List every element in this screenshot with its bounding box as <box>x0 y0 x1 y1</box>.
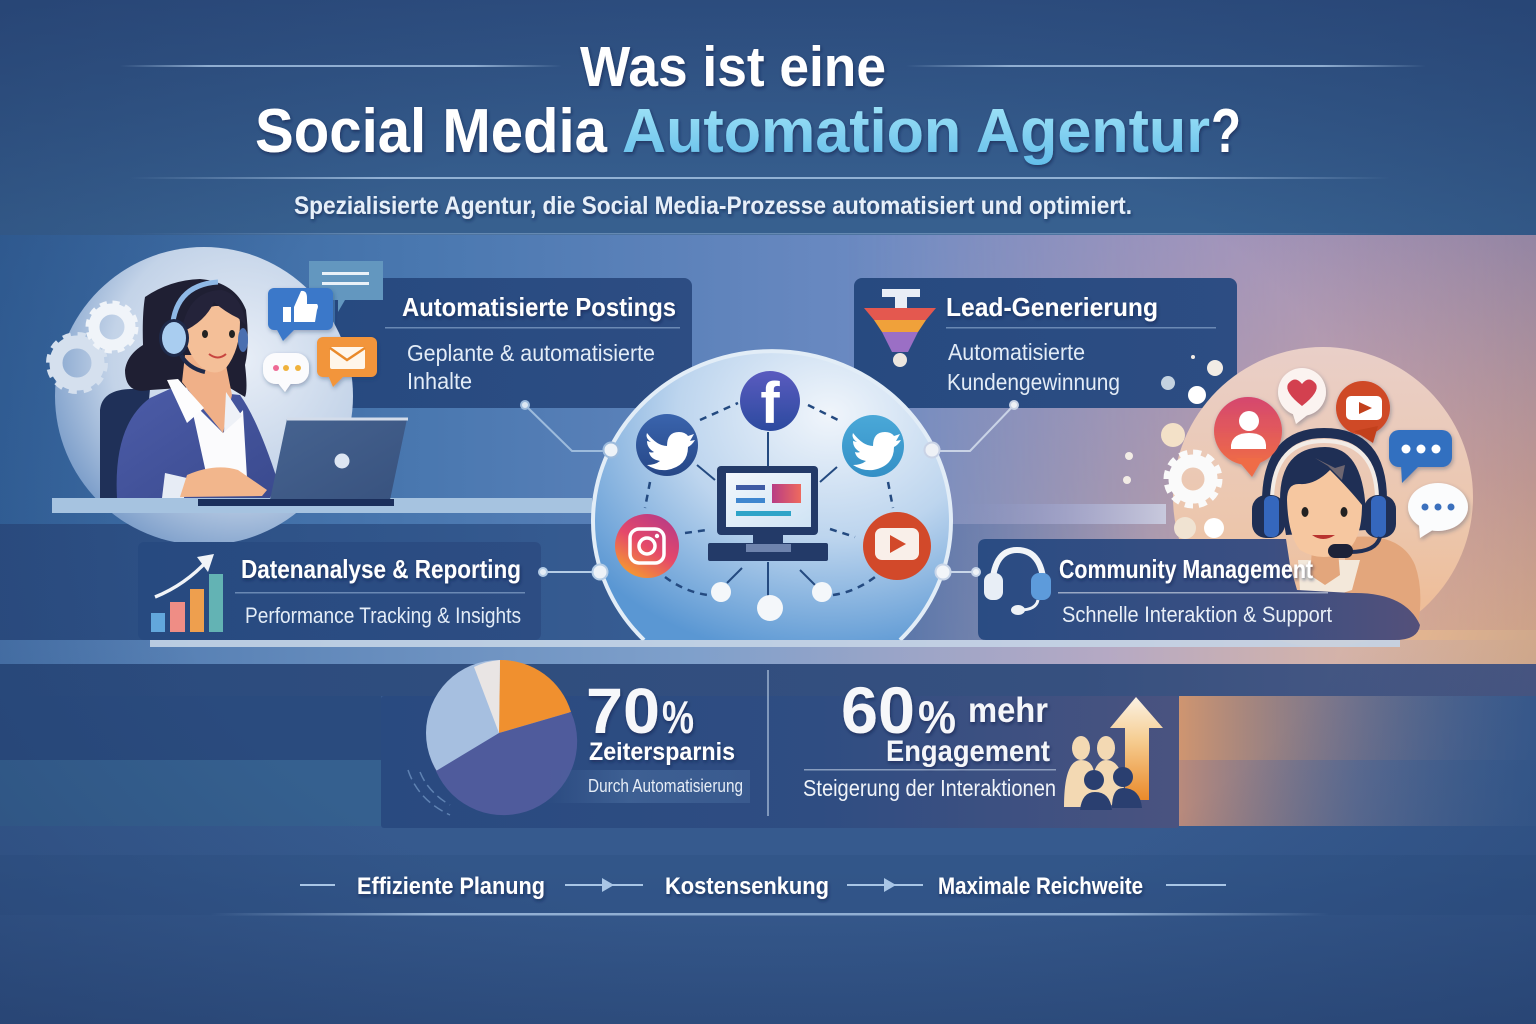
icon: bar chart <box>151 554 223 632</box>
title line 1: Was ist eine <box>580 35 886 99</box>
icon: message bubble <box>309 261 383 312</box>
title line 2 <box>255 97 1241 166</box>
panel: Datenanalyse & Reporting: Datenanalyse & Reporting <box>241 554 521 584</box>
stat: 60% <box>803 673 1056 801</box>
icon: heart bubble <box>1278 368 1326 424</box>
network nodes <box>711 582 832 621</box>
panel: Lead-Generierung: Lead-Generierung <box>946 292 1158 322</box>
stat: 60%: mehr <box>968 691 1048 730</box>
shelf <box>150 640 1400 647</box>
icon: youtube <box>863 512 931 580</box>
title line 2: ? <box>1211 97 1241 166</box>
icon: thumbs up bubble <box>268 288 333 341</box>
connector: lead to hub <box>924 401 1018 458</box>
connector network <box>645 403 893 595</box>
panel: Datenanalyse & Reporting: Performance Tracking & Insights <box>245 603 521 628</box>
arrow <box>565 878 643 892</box>
benefit: Maximale Reichweite: Maximale Reichweite <box>938 873 1143 900</box>
connector: community to hub <box>936 564 980 580</box>
stat: 60%: 60 <box>841 673 915 747</box>
stat: 70%: 70 <box>586 675 660 747</box>
icon: mail bubble <box>317 337 377 387</box>
stat: 70%: % <box>662 691 694 743</box>
panel: Lead-Generierung: Kundengewinnung <box>947 369 1120 395</box>
icon: instagram <box>615 514 679 578</box>
title line 2: Social Media <box>255 97 607 166</box>
subtitle: Spezialisierte Agentur, die Social Media-Prozesse automatisiert und optimiert. <box>294 192 1132 220</box>
icon: twitter right <box>842 415 904 477</box>
stat: 70%: Zeitersparnis <box>589 738 735 766</box>
stat: 60%: Steigerung der Interaktionen <box>803 775 1056 801</box>
icon: blue chat bubble <box>1389 430 1452 483</box>
central hub <box>593 351 951 640</box>
panel: Datenanalyse & Reporting <box>138 542 541 640</box>
pie chart <box>408 660 577 815</box>
title <box>255 35 1241 166</box>
title line 2: Automation Agentur <box>622 97 1210 166</box>
panel: Automatisierte Postings: Automatisierte Postings <box>402 292 676 322</box>
connector: postings to hub <box>521 401 618 458</box>
panel: Community Management: Community Management <box>1059 554 1313 584</box>
caption strip: Durch Automatisierung <box>588 776 743 796</box>
icon: twitter left <box>636 414 698 476</box>
stat: 70% <box>586 675 735 766</box>
stat: 60%: Engagement <box>886 735 1050 768</box>
arrow <box>847 878 923 892</box>
decorative dots <box>1123 355 1224 539</box>
benefit: Effiziente Planung: Effiziente Planung <box>357 873 545 900</box>
icon: headset <box>984 550 1051 615</box>
icon: typing bubble <box>263 353 309 392</box>
panel: statistics <box>381 660 1179 828</box>
icon: facebook: f <box>760 371 780 436</box>
panel: Community Management: Schnelle Interaktion & Support <box>1062 602 1332 627</box>
panel: left illustration <box>49 247 592 545</box>
icon: growth arrow and people <box>1064 697 1163 810</box>
panel: Automatisierte Postings <box>335 278 692 408</box>
icon: laptop <box>198 419 408 506</box>
panel: Lead-Generierung <box>854 278 1237 408</box>
icon: video bubble <box>1336 381 1390 443</box>
icon: funnel <box>864 289 936 367</box>
panel: Automatisierte Postings: Geplante & automatisierte <box>407 340 655 366</box>
caption strip <box>547 770 750 803</box>
illustration: support agent <box>1252 433 1420 625</box>
icon: white chat bubble <box>1408 483 1468 538</box>
illustration: agent <box>100 279 278 498</box>
benefits row <box>300 873 1226 900</box>
icon: computer <box>708 466 828 561</box>
icon: profile pin <box>1214 397 1282 477</box>
icon: facebook <box>740 371 800 436</box>
icon: gear <box>1167 453 1219 505</box>
panel: Community Management <box>978 539 1420 640</box>
benefit: Kostensenkung: Kostensenkung <box>665 873 829 900</box>
panel: Lead-Generierung: Automatisierte <box>948 339 1085 365</box>
panel: Automatisierte Postings: Inhalte <box>407 368 472 394</box>
panel: right illustration <box>1123 347 1473 647</box>
stat: 60%: % <box>918 691 956 743</box>
icon: gears <box>49 303 136 391</box>
connector: data to hub <box>539 564 608 580</box>
